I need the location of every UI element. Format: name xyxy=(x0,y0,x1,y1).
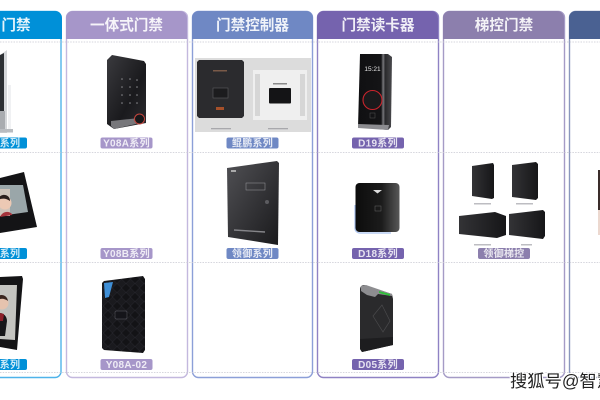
icon: kiosk terminal xyxy=(0,50,13,133)
column header xyxy=(0,11,62,39)
column header: 门禁 xyxy=(1,16,31,34)
label: Lingyu series: 领御系列 xyxy=(232,247,273,260)
icon: card reader D05 xyxy=(360,285,393,352)
white board xyxy=(253,70,307,120)
label: Penghu series: 鲲鹏系列 xyxy=(232,137,273,150)
label: row 1 xyxy=(0,137,27,150)
icon: keypad reader Y08A xyxy=(107,55,146,129)
column header: 门禁读卡器 xyxy=(342,16,415,34)
icon: fingerprint reader D19: 15:21 xyxy=(364,66,381,73)
label: row 3: 系列 xyxy=(0,358,20,371)
label: D05 series xyxy=(352,358,404,371)
label: row 1: 系列 xyxy=(0,137,20,150)
column header xyxy=(443,11,564,39)
icon: black reader Y08A-02 xyxy=(102,276,145,353)
label: D19 series: D19系列 xyxy=(358,137,398,150)
icon: elevator controller boxes xyxy=(459,162,545,246)
column: face recognition access control (cropped) xyxy=(0,11,62,378)
column: integrated access control xyxy=(66,11,188,378)
column: elevator access control xyxy=(443,11,564,378)
column header: 梯控门禁 xyxy=(475,16,534,34)
icon: card reader D18 xyxy=(355,183,400,233)
column header: 一体式门禁 xyxy=(90,16,163,34)
column: card readers xyxy=(317,11,438,378)
label: row 2: 系列 xyxy=(0,247,20,260)
icon: fingerprint reader D19 xyxy=(358,54,392,130)
icon: cropped device xyxy=(598,170,600,235)
label: row 2 xyxy=(0,247,27,260)
label: Y08B series: Y08B系列 xyxy=(103,247,150,260)
label: D05 series: D05系列 xyxy=(358,358,398,371)
label: Y08A-02: Y08A-02 xyxy=(106,360,147,371)
icon: tablet terminal xyxy=(0,172,37,233)
column header xyxy=(569,11,600,39)
column header: 门禁控制器 xyxy=(216,16,289,34)
column header xyxy=(192,11,313,39)
board captions xyxy=(211,128,288,129)
dark board xyxy=(197,60,244,118)
column: cropped sixth column xyxy=(569,11,600,378)
label: Lingyu elevator control xyxy=(478,247,530,260)
icon: tablet terminal with portrait xyxy=(0,276,23,350)
icon: controller box xyxy=(227,161,279,245)
label: D18 series xyxy=(352,247,404,260)
label: row 3 xyxy=(0,358,27,371)
image: two controller boards xyxy=(195,58,311,132)
label: Lingyu series xyxy=(226,247,278,260)
label: D18 series: D18系列 xyxy=(358,247,398,260)
label: Y08A series: Y08A系列 xyxy=(103,137,150,150)
column header xyxy=(66,11,187,39)
column header xyxy=(317,11,438,39)
label: D19 series xyxy=(352,137,404,150)
label: Lingyu elevator control: 领御梯控 xyxy=(483,247,525,260)
label: Penghu series xyxy=(226,137,278,150)
column: access controllers xyxy=(192,11,313,378)
